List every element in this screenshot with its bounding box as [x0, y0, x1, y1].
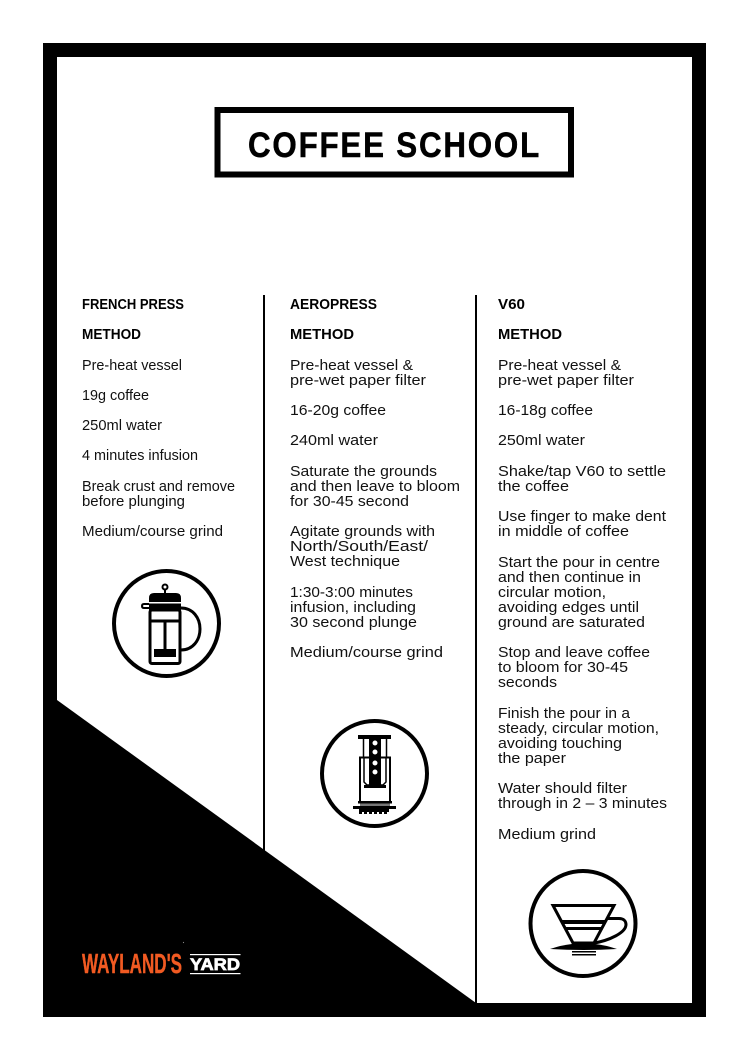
- V60 steps: Use finger to make dent: [498, 509, 666, 525]
- AeroPress steps: 1:30-3:00 minutes: [290, 585, 413, 601]
- column: AeroPress: [290, 297, 460, 661]
- heading: French press: FRENCH PRESS: [82, 297, 184, 313]
- diagonal black corner: [57, 700, 476, 1003]
- V60 steps: through in 2 – 3 minutes: [498, 796, 667, 812]
- logo word: Wayland's: WAYLAND'S: [82, 948, 182, 979]
- title box: [218, 110, 571, 174]
- heading: V60: V60: [498, 297, 525, 313]
- French press steps: Pre-heat vessel: [82, 358, 182, 374]
- AeroPress steps: North/South/East/: [290, 539, 429, 555]
- heading: AeroPress: AEROPRESS: [290, 297, 377, 313]
- AeroPress steps: Agitate grounds with: [290, 524, 435, 540]
- V60 steps: Finish the pour in a: [498, 706, 631, 722]
- V60 steps: to bloom for 30-45: [498, 660, 628, 676]
- icon: French press: [114, 571, 219, 676]
- AeroPress steps: infusion, including: [290, 600, 416, 616]
- V60 steps: 250ml water: [498, 433, 585, 449]
- V60 steps: Pre-heat vessel &: [498, 358, 621, 374]
- V60 steps: in middle of coffee: [498, 524, 629, 540]
- French press steps: before plunging: [82, 494, 185, 510]
- French press steps: [82, 358, 235, 540]
- AeroPress steps: Medium/course grind: [290, 645, 443, 661]
- V60 steps: Start the pour in centre: [498, 555, 660, 571]
- AeroPress steps: 30 second plunge: [290, 615, 417, 631]
- V60 steps: Water should filter: [498, 781, 627, 797]
- icon: AeroPress: [322, 721, 427, 826]
- V60 steps: avoiding edges until: [498, 600, 639, 616]
- V60 steps: the coffee: [498, 479, 569, 495]
- logo word: Yard: YARD: [190, 956, 240, 974]
- AeroPress steps: [290, 358, 460, 661]
- subheading: method: METHOD: [82, 327, 141, 343]
- AeroPress steps: and then leave to bloom: [290, 479, 460, 495]
- column divider 2: [475, 295, 477, 1003]
- AeroPress steps: 16-20g coffee: [290, 403, 386, 419]
- black frame: [50, 50, 699, 1010]
- V60 steps: [498, 358, 667, 843]
- column: French press: [82, 297, 235, 540]
- V60 steps: pre-wet paper filter: [498, 373, 634, 389]
- French press steps: 4 minutes infusion: [82, 448, 198, 464]
- French press steps: 250ml water: [82, 418, 162, 434]
- V60 steps: seconds: [498, 675, 557, 691]
- AeroPress steps: for 30-45 second: [290, 494, 409, 510]
- AeroPress steps: pre-wet paper filter: [290, 373, 426, 389]
- AeroPress steps: 240ml water: [290, 433, 378, 449]
- V60 steps: Stop and leave coffee: [498, 645, 650, 661]
- subheading: method: METHOD: [290, 327, 354, 343]
- subheading: method: METHOD: [498, 327, 562, 343]
- V60 steps: ground are saturated: [498, 615, 645, 631]
- logo: Wayland's Yard: [82, 942, 240, 979]
- AeroPress steps: Pre-heat vessel &: [290, 358, 413, 374]
- V60 steps: 16-18g coffee: [498, 403, 593, 419]
- title: COFFEE SCHOOL: [248, 126, 541, 165]
- V60 steps: the paper: [498, 751, 566, 767]
- V60 steps: Shake/tap V60 to settle: [498, 464, 666, 480]
- AeroPress steps: West technique: [290, 554, 400, 570]
- AeroPress steps: Saturate the grounds: [290, 464, 437, 480]
- V60 steps: avoiding touching: [498, 736, 622, 752]
- French press steps: Break crust and remove: [82, 479, 235, 495]
- icon: V60 dripper: [530, 871, 636, 976]
- V60 steps: steady, circular motion,: [498, 721, 659, 737]
- V60 steps: circular motion,: [498, 585, 606, 601]
- V60 steps: and then continue in: [498, 570, 641, 586]
- column: V60: [498, 297, 667, 843]
- column divider 1: [263, 295, 265, 851]
- French press steps: 19g coffee: [82, 388, 149, 404]
- V60 steps: Medium grind: [498, 827, 596, 843]
- French press steps: Medium/course grind: [82, 524, 223, 540]
